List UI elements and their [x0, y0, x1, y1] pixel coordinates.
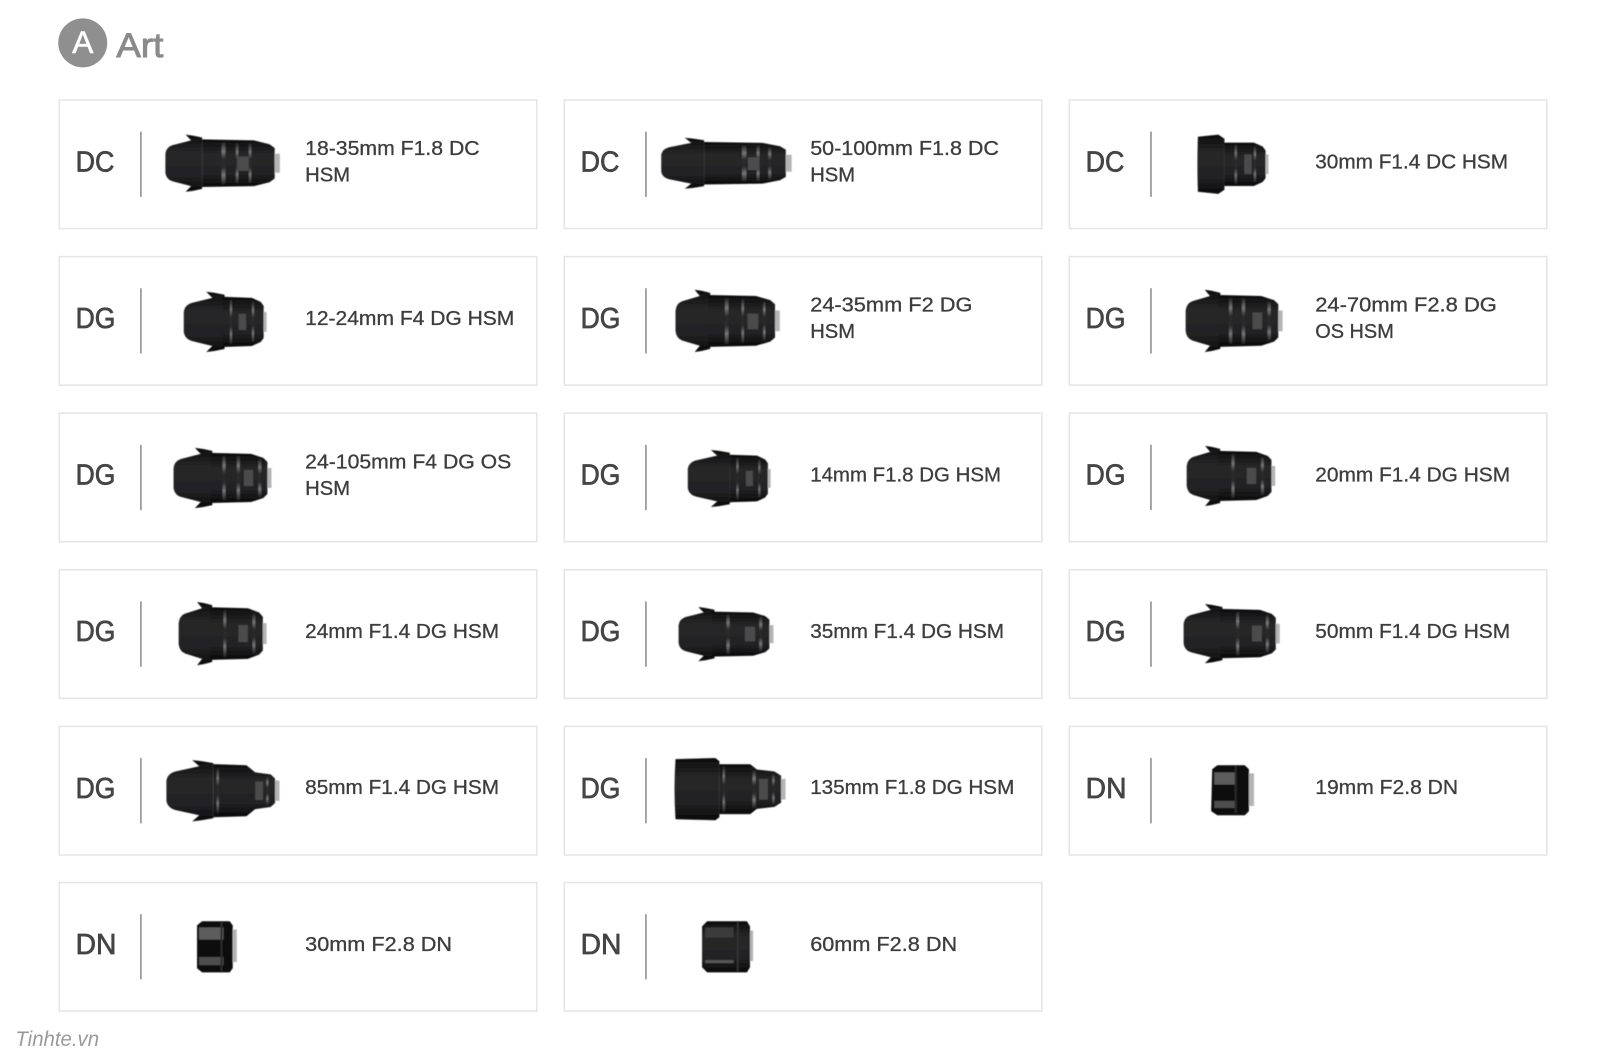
icon: lens: [197, 921, 237, 972]
card: 24-70mm F2.8 DG OS HSM: OS HSM: [1315, 321, 1394, 343]
card: 50mm F1.4 DG HSM: 50mm F1.4 DG HSM: [1315, 621, 1510, 643]
icon: lens: [679, 607, 773, 661]
card: 19mm F2.8 DN: DN: [1086, 773, 1126, 805]
card: 12-24mm F4 DG HSM: DG: [76, 303, 115, 335]
icon: lens: [166, 760, 279, 821]
card: 50mm F1.4 DG HSM: DG: [1086, 616, 1125, 648]
card: 50-100mm F1.8 DC HSM: 50-100mm F1.8 DC: [810, 138, 999, 160]
icon: lens: [1187, 446, 1275, 506]
watermark: Tinhte.vn: Tinhte.vn: [15, 1027, 99, 1051]
icon: lens: [179, 602, 267, 665]
heading: Art: [58, 18, 164, 67]
card: 35mm F1.4 DG HSM: 35mm F1.4 DG HSM: [810, 621, 1004, 643]
card: 50-100mm F1.8 DC HSM: DC: [581, 146, 619, 178]
card: 14mm F1.8 DG HSM: 14mm F1.8 DG HSM: [810, 465, 1001, 487]
heading text: Art: [116, 27, 164, 65]
card: 19mm F2.8 DN: 19mm F2.8 DN: [1315, 777, 1458, 799]
icon: lens: [675, 758, 786, 820]
card: 19mm F2.8 DN: [1069, 726, 1547, 855]
card: 135mm F1.8 DG HSM: DG: [581, 773, 620, 805]
icon: lens: [661, 138, 792, 189]
icon: lens: [1197, 135, 1269, 194]
card: 20mm F1.4 DG HSM: 20mm F1.4 DG HSM: [1315, 465, 1510, 487]
icon: lens: [165, 135, 280, 192]
card: 35mm F1.4 DG HSM: [564, 570, 1042, 698]
icon: lens: [174, 448, 272, 508]
card: 14mm F1.8 DG HSM: [564, 413, 1042, 542]
card: 20mm F1.4 DG HSM: DG: [1086, 460, 1125, 492]
card: 30mm F1.4 DC HSM: [1069, 100, 1547, 229]
card: 24-70mm F2.8 DG OS HSM: [1069, 257, 1547, 385]
card: 24-35mm F2 DG HSM: 24-35mm F2 DG: [810, 295, 972, 317]
card: 50-100mm F1.8 DC HSM: HSM: [810, 165, 855, 187]
card: 18-35mm F1.8 DC HSM: HSM: [305, 165, 350, 187]
card: 60mm F2.8 DN: [564, 883, 1042, 1011]
icon: A badge: A: [72, 24, 94, 60]
icon: lens: [1211, 765, 1254, 815]
card: 24-35mm F2 DG HSM: HSM: [810, 321, 855, 343]
card: 85mm F1.4 DG HSM: 85mm F1.4 DG HSM: [305, 777, 499, 799]
card: 24mm F1.4 DG HSM: 24mm F1.4 DG HSM: [305, 621, 499, 643]
card: 85mm F1.4 DG HSM: [59, 726, 537, 855]
card: 14mm F1.8 DG HSM: DG: [581, 460, 620, 492]
icon: lens: [676, 290, 780, 352]
icon: lens: [184, 292, 267, 352]
card: 24mm F1.4 DG HSM: [59, 570, 537, 698]
card: 24-35mm F2 DG HSM: [564, 257, 1042, 385]
card: 30mm F2.8 DN: 30mm F2.8 DN: [305, 934, 452, 956]
card: 24-105mm F4 DG OS HSM: HSM: [305, 478, 350, 500]
card: 24-105mm F4 DG OS HSM: DG: [76, 460, 115, 492]
icon: lens: [688, 450, 771, 507]
card: 35mm F1.4 DG HSM: DG: [581, 616, 620, 648]
card: 30mm F1.4 DC HSM: DC: [1086, 146, 1124, 178]
icon: lens: [1184, 604, 1280, 663]
card: 30mm F1.4 DC HSM: 30mm F1.4 DC HSM: [1315, 151, 1508, 173]
card: 24-70mm F2.8 DG OS HSM: DG: [1086, 303, 1125, 335]
card: 18-35mm F1.8 DC HSM: DC: [76, 146, 114, 178]
card: 24mm F1.4 DG HSM: DG: [76, 616, 115, 648]
card: 50mm F1.4 DG HSM: [1069, 570, 1547, 698]
card: 24-105mm F4 DG OS HSM: [59, 413, 537, 542]
card: 30mm F2.8 DN: [59, 883, 537, 1011]
card: 24-35mm F2 DG HSM: DG: [581, 303, 620, 335]
card: 24-105mm F4 DG OS HSM: 24-105mm F4 DG OS: [305, 451, 511, 473]
card: 12-24mm F4 DG HSM: [59, 257, 537, 385]
card: 85mm F1.4 DG HSM: DG: [76, 773, 115, 805]
card: 135mm F1.8 DG HSM: [564, 726, 1042, 855]
card: 60mm F2.8 DN: DN: [581, 929, 621, 961]
icon: lens: [702, 921, 753, 972]
card: 18-35mm F1.8 DC HSM: 18-35mm F1.8 DC: [305, 138, 480, 160]
icon: lens: [1186, 290, 1283, 352]
card: 50-100mm F1.8 DC HSM: [564, 100, 1042, 229]
card: 18-35mm F1.8 DC HSM: [59, 100, 537, 229]
card: 24-70mm F2.8 DG OS HSM: 24-70mm F2.8 DG: [1315, 295, 1497, 317]
card: 30mm F2.8 DN: DN: [76, 929, 116, 961]
card: 135mm F1.8 DG HSM: 135mm F1.8 DG HSM: [810, 777, 1014, 799]
card: 20mm F1.4 DG HSM: [1069, 413, 1547, 542]
card: 60mm F2.8 DN: 60mm F2.8 DN: [810, 934, 957, 956]
card: 12-24mm F4 DG HSM: 12-24mm F4 DG HSM: [305, 308, 514, 330]
